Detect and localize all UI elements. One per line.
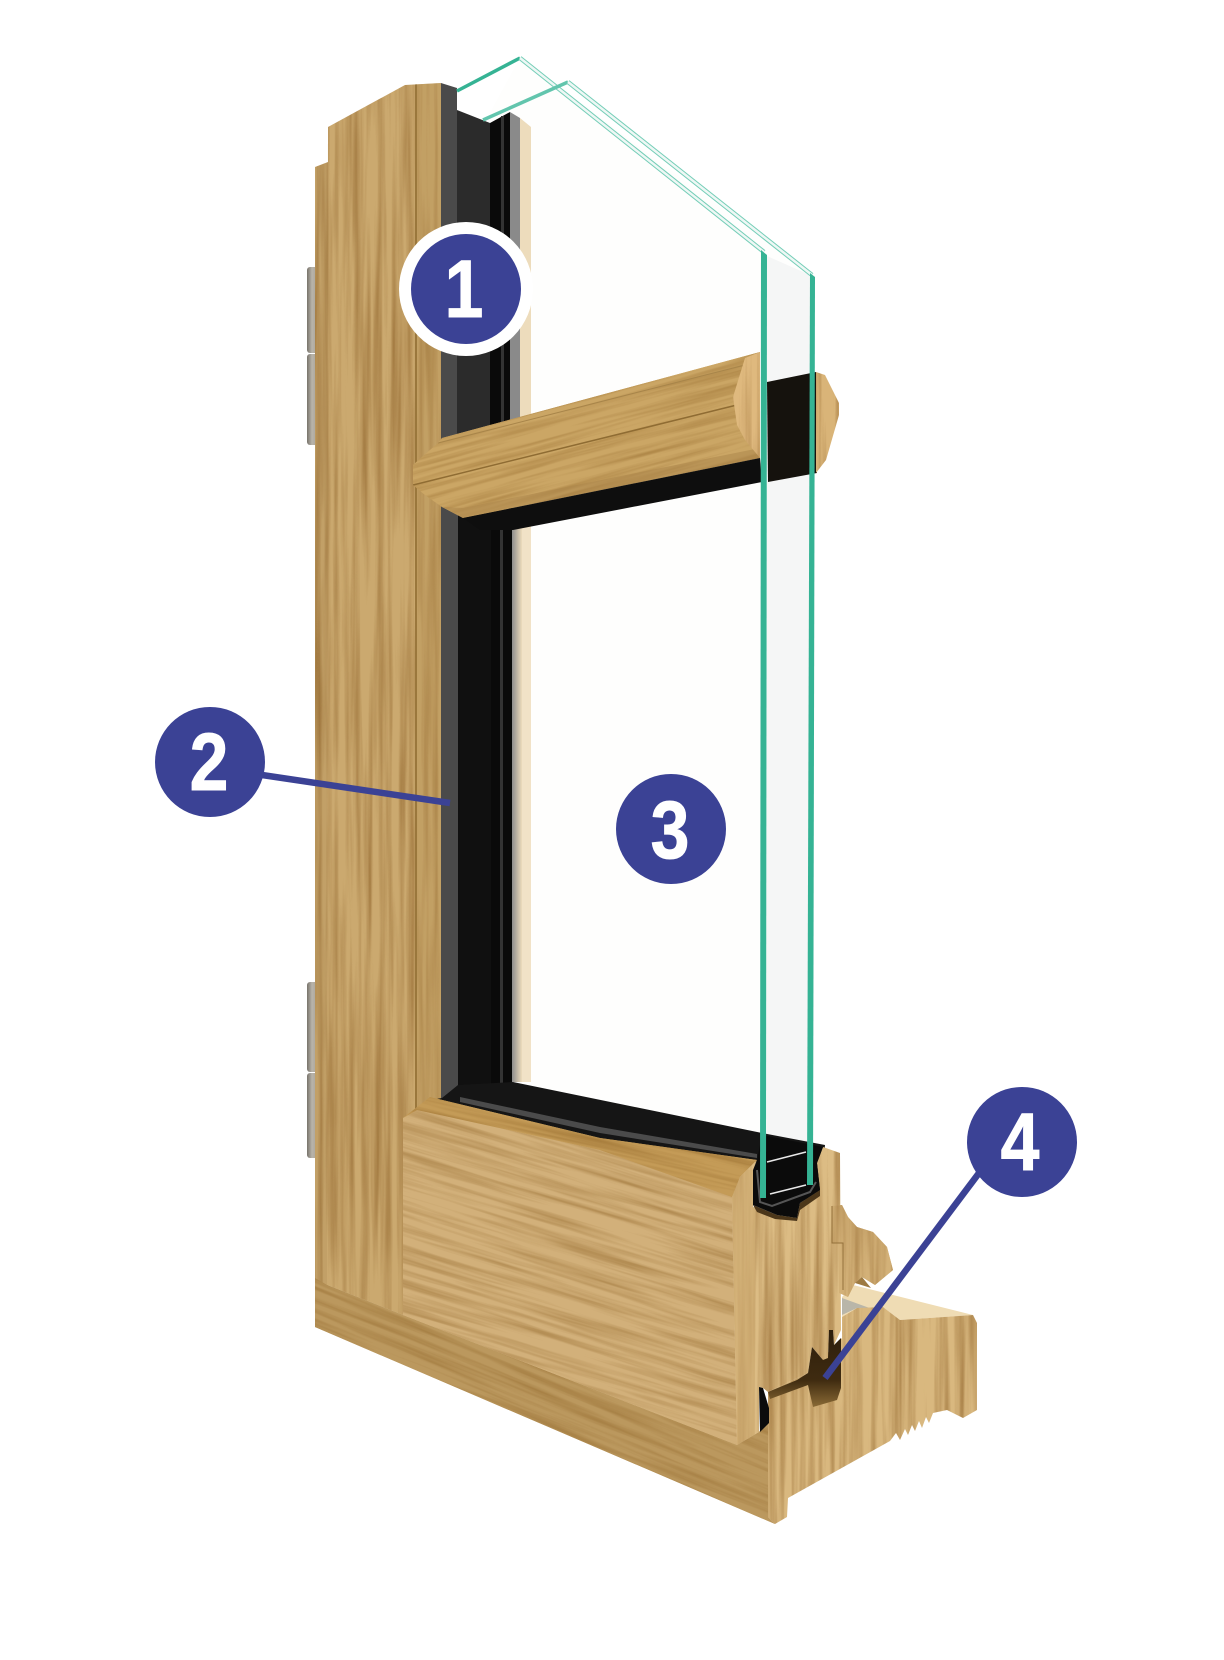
frame outer strip (315, 160, 328, 1295)
glass pane: outer (483, 82, 815, 1185)
sill top surface (842, 1285, 973, 1320)
marker 4: 4 (1001, 1097, 1039, 1188)
marker 3 (616, 774, 726, 884)
sash end section (732, 1147, 841, 1445)
drainage groove (768, 1330, 841, 1407)
black spacer between panes (767, 372, 817, 482)
weather drip base (832, 1205, 893, 1297)
glazing seal (753, 1135, 823, 1218)
mullion end cap (733, 352, 760, 458)
drip profile seam (832, 1206, 843, 1290)
glass pane: inner (457, 58, 767, 1198)
hinge: lower (307, 982, 327, 1158)
frame stile (327, 80, 442, 1320)
glass gap between panes (767, 256, 810, 1170)
marker 2: 2 (190, 717, 228, 808)
sill end section (768, 1307, 977, 1524)
bottom black channel (430, 1082, 825, 1212)
marker 1 (399, 222, 533, 356)
window cross-section illustration (245, 58, 985, 1579)
marker 3: 3 (651, 785, 689, 876)
black weather seal (759, 1387, 769, 1432)
aluminium profile: upper (441, 83, 531, 520)
marker 4 (967, 1087, 1077, 1197)
weather drip (832, 1205, 893, 1297)
leader line 2 (262, 775, 450, 803)
bottom frame band (315, 1278, 775, 1524)
sill shaded sliver (842, 1298, 875, 1315)
glazing shadow (753, 1190, 820, 1221)
drip shadow notch (855, 1277, 871, 1288)
black spacer under mullion (463, 458, 762, 530)
mullion outer cap (816, 372, 839, 473)
glass back tint (486, 58, 812, 1160)
leader line 4 (825, 1173, 979, 1378)
mullion bar (413, 352, 760, 518)
marker 2 (155, 707, 265, 817)
sash top bevel (404, 1097, 757, 1197)
sash face (403, 1110, 739, 1445)
marker 1: 1 (445, 244, 483, 335)
hinge: upper (307, 267, 327, 445)
channel highlight (460, 1097, 757, 1158)
aluminium profile: lower (441, 500, 531, 1100)
